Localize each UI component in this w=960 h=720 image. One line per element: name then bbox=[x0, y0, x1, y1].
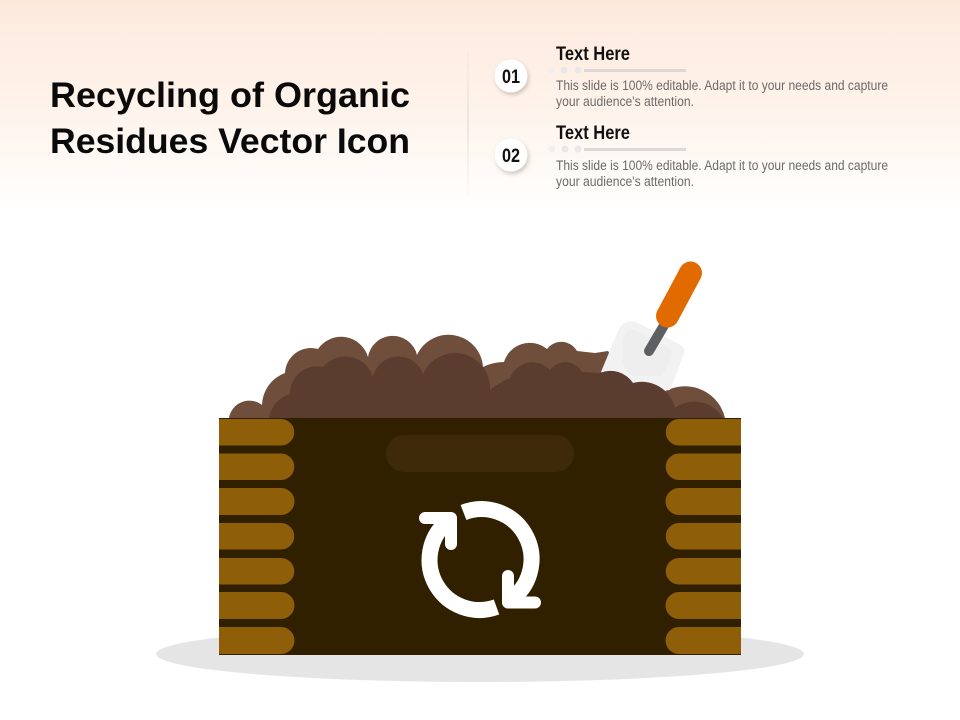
description 02: This slide is 100% editable. Adapt it to your needs and capture bbox=[556, 158, 888, 173]
number badge 01 bbox=[494, 60, 528, 92]
title bbox=[50, 76, 410, 161]
underline 01 bbox=[548, 66, 686, 74]
bin body bbox=[219, 418, 741, 655]
description 02 bbox=[556, 158, 888, 189]
trowel handle bbox=[668, 273, 690, 316]
trowel blade bbox=[601, 321, 684, 392]
title: Recycling of Organic bbox=[50, 76, 410, 115]
trowel shaft bbox=[649, 322, 666, 351]
compost bin illustration bbox=[219, 273, 741, 655]
description 01: This slide is 100% editable. Adapt it to your needs and capture bbox=[556, 78, 888, 93]
heading 02: Text Here bbox=[556, 122, 630, 144]
bin label plate bbox=[386, 435, 574, 472]
right slats bbox=[666, 419, 741, 654]
number badge 02: 02 bbox=[502, 146, 520, 167]
list item 01 bbox=[494, 43, 888, 109]
icon: recycle arrows bbox=[425, 509, 535, 610]
description 01 bbox=[556, 78, 888, 109]
number badge 02 bbox=[494, 138, 528, 172]
description 01: your audience's attention. bbox=[556, 94, 694, 109]
heading 01: Text Here bbox=[556, 43, 630, 65]
title: Residues Vector Icon bbox=[50, 122, 410, 161]
underline 02 bbox=[548, 146, 686, 152]
number badge 01: 01 bbox=[502, 67, 520, 88]
list item 02 bbox=[494, 122, 888, 189]
description 02: your audience's attention. bbox=[556, 174, 694, 189]
front soil mound bbox=[269, 353, 723, 418]
trowel blade inner bbox=[622, 329, 672, 376]
ground shadow bbox=[156, 626, 804, 682]
back soil mound bbox=[229, 335, 725, 418]
left slats bbox=[219, 419, 294, 654]
trowel bbox=[601, 273, 690, 392]
